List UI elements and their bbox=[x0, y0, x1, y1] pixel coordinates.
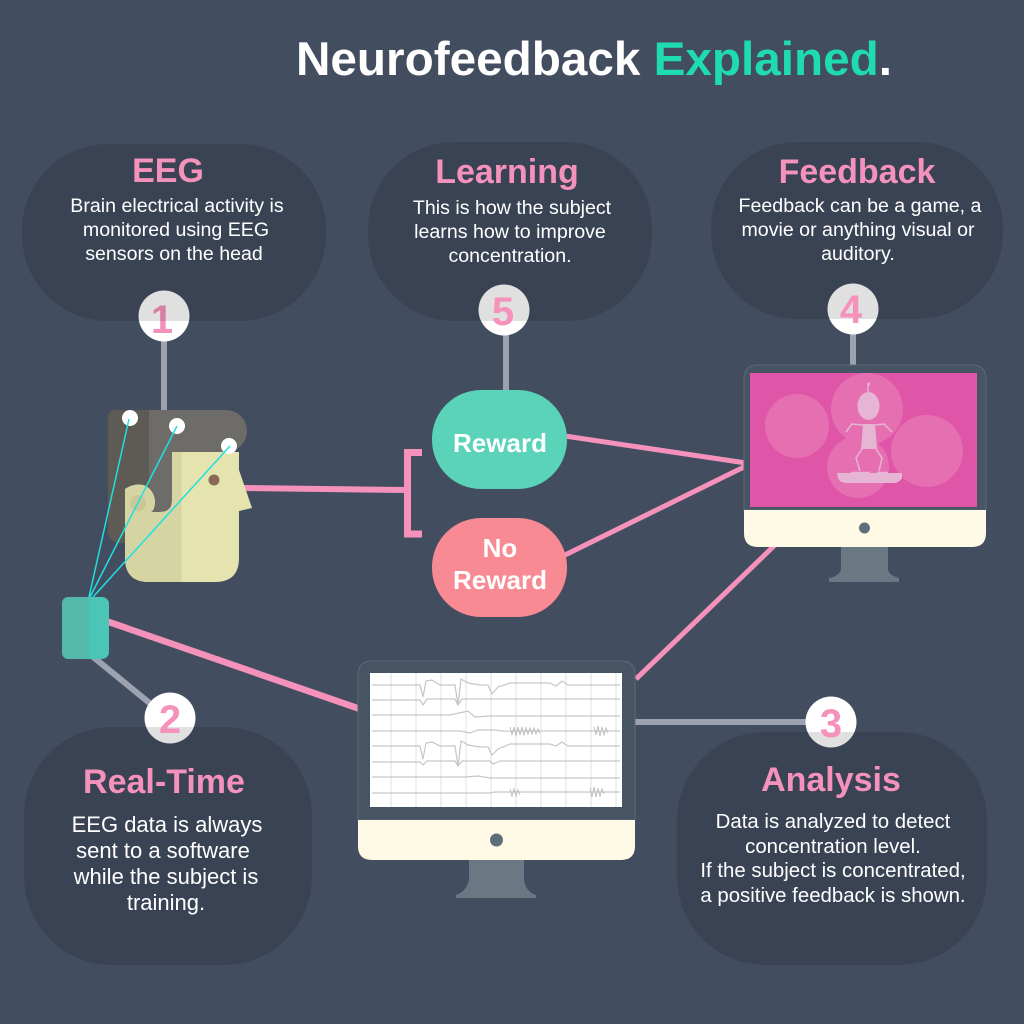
panel: Analysis: If the subject is concentrated, bbox=[700, 860, 966, 882]
panel: Analysis: Analysis bbox=[761, 761, 901, 799]
panel: Feedback: Feedback can be a game, a bbox=[739, 195, 982, 217]
step numbers 2 to 5: 3 bbox=[820, 702, 842, 746]
panel: Learning: This is how the subject bbox=[413, 197, 612, 219]
panel: Learning: learns how to improve bbox=[414, 221, 606, 243]
no reward node bbox=[432, 518, 567, 617]
panel: Real-Time: Real-Time bbox=[83, 763, 245, 801]
icon: EEG amplifier bbox=[62, 419, 230, 659]
step number badges: 1 bbox=[151, 298, 173, 342]
reward node: Reward bbox=[453, 428, 547, 458]
icon: alien on hoverboard bbox=[837, 382, 902, 483]
panel: Analysis: Data is analyzed to detect bbox=[716, 811, 951, 833]
panel: Analysis bbox=[677, 732, 987, 965]
panel: Feedback: auditory. bbox=[821, 243, 895, 265]
panel: EEG bbox=[22, 144, 326, 321]
chart: EEG traces bbox=[372, 673, 620, 807]
step number badges bbox=[138, 284, 878, 748]
no reward node: No bbox=[483, 533, 517, 563]
panel: Analysis: concentration level. bbox=[745, 836, 921, 858]
panel: Learning bbox=[368, 142, 652, 321]
panel: Feedback: Feedback bbox=[779, 153, 936, 191]
panel: Feedback: movie or anything visual or bbox=[741, 219, 975, 241]
panel: EEG: sensors on the head bbox=[85, 243, 263, 265]
panel: Analysis: a positive feedback is shown. bbox=[700, 885, 966, 907]
monitor: feedback game bbox=[744, 365, 986, 582]
panel: Real-Time bbox=[24, 727, 312, 965]
monitor: EEG analysis bbox=[358, 661, 635, 898]
panel: EEG: Brain electrical activity is bbox=[70, 195, 284, 217]
step numbers 2 to 5: 2 bbox=[159, 698, 181, 742]
icon: head with EEG sensors bbox=[108, 410, 252, 582]
panel: Learning: Learning bbox=[435, 153, 579, 191]
step numbers 2 to 5: 5 bbox=[492, 290, 514, 334]
connector lines bbox=[92, 330, 853, 722]
panel: Real-Time: training. bbox=[127, 890, 205, 915]
panel: EEG: EEG bbox=[132, 152, 204, 190]
panel: Learning: concentration. bbox=[448, 245, 572, 267]
panel: Real-Time: EEG data is always bbox=[72, 812, 262, 837]
reward node bbox=[432, 390, 567, 489]
panel: Real-Time: while the subject is bbox=[73, 864, 258, 889]
title: Neurofeedback Explained. bbox=[296, 32, 892, 85]
panel: Real-Time: sent to a software bbox=[76, 838, 250, 863]
step numbers 2 to 5: 4 bbox=[840, 288, 863, 332]
panel: EEG: monitored using EEG bbox=[83, 219, 269, 241]
step numbers 2 to 5 bbox=[159, 288, 863, 746]
panel: Feedback bbox=[711, 142, 1003, 319]
no reward node: Reward bbox=[453, 565, 547, 595]
